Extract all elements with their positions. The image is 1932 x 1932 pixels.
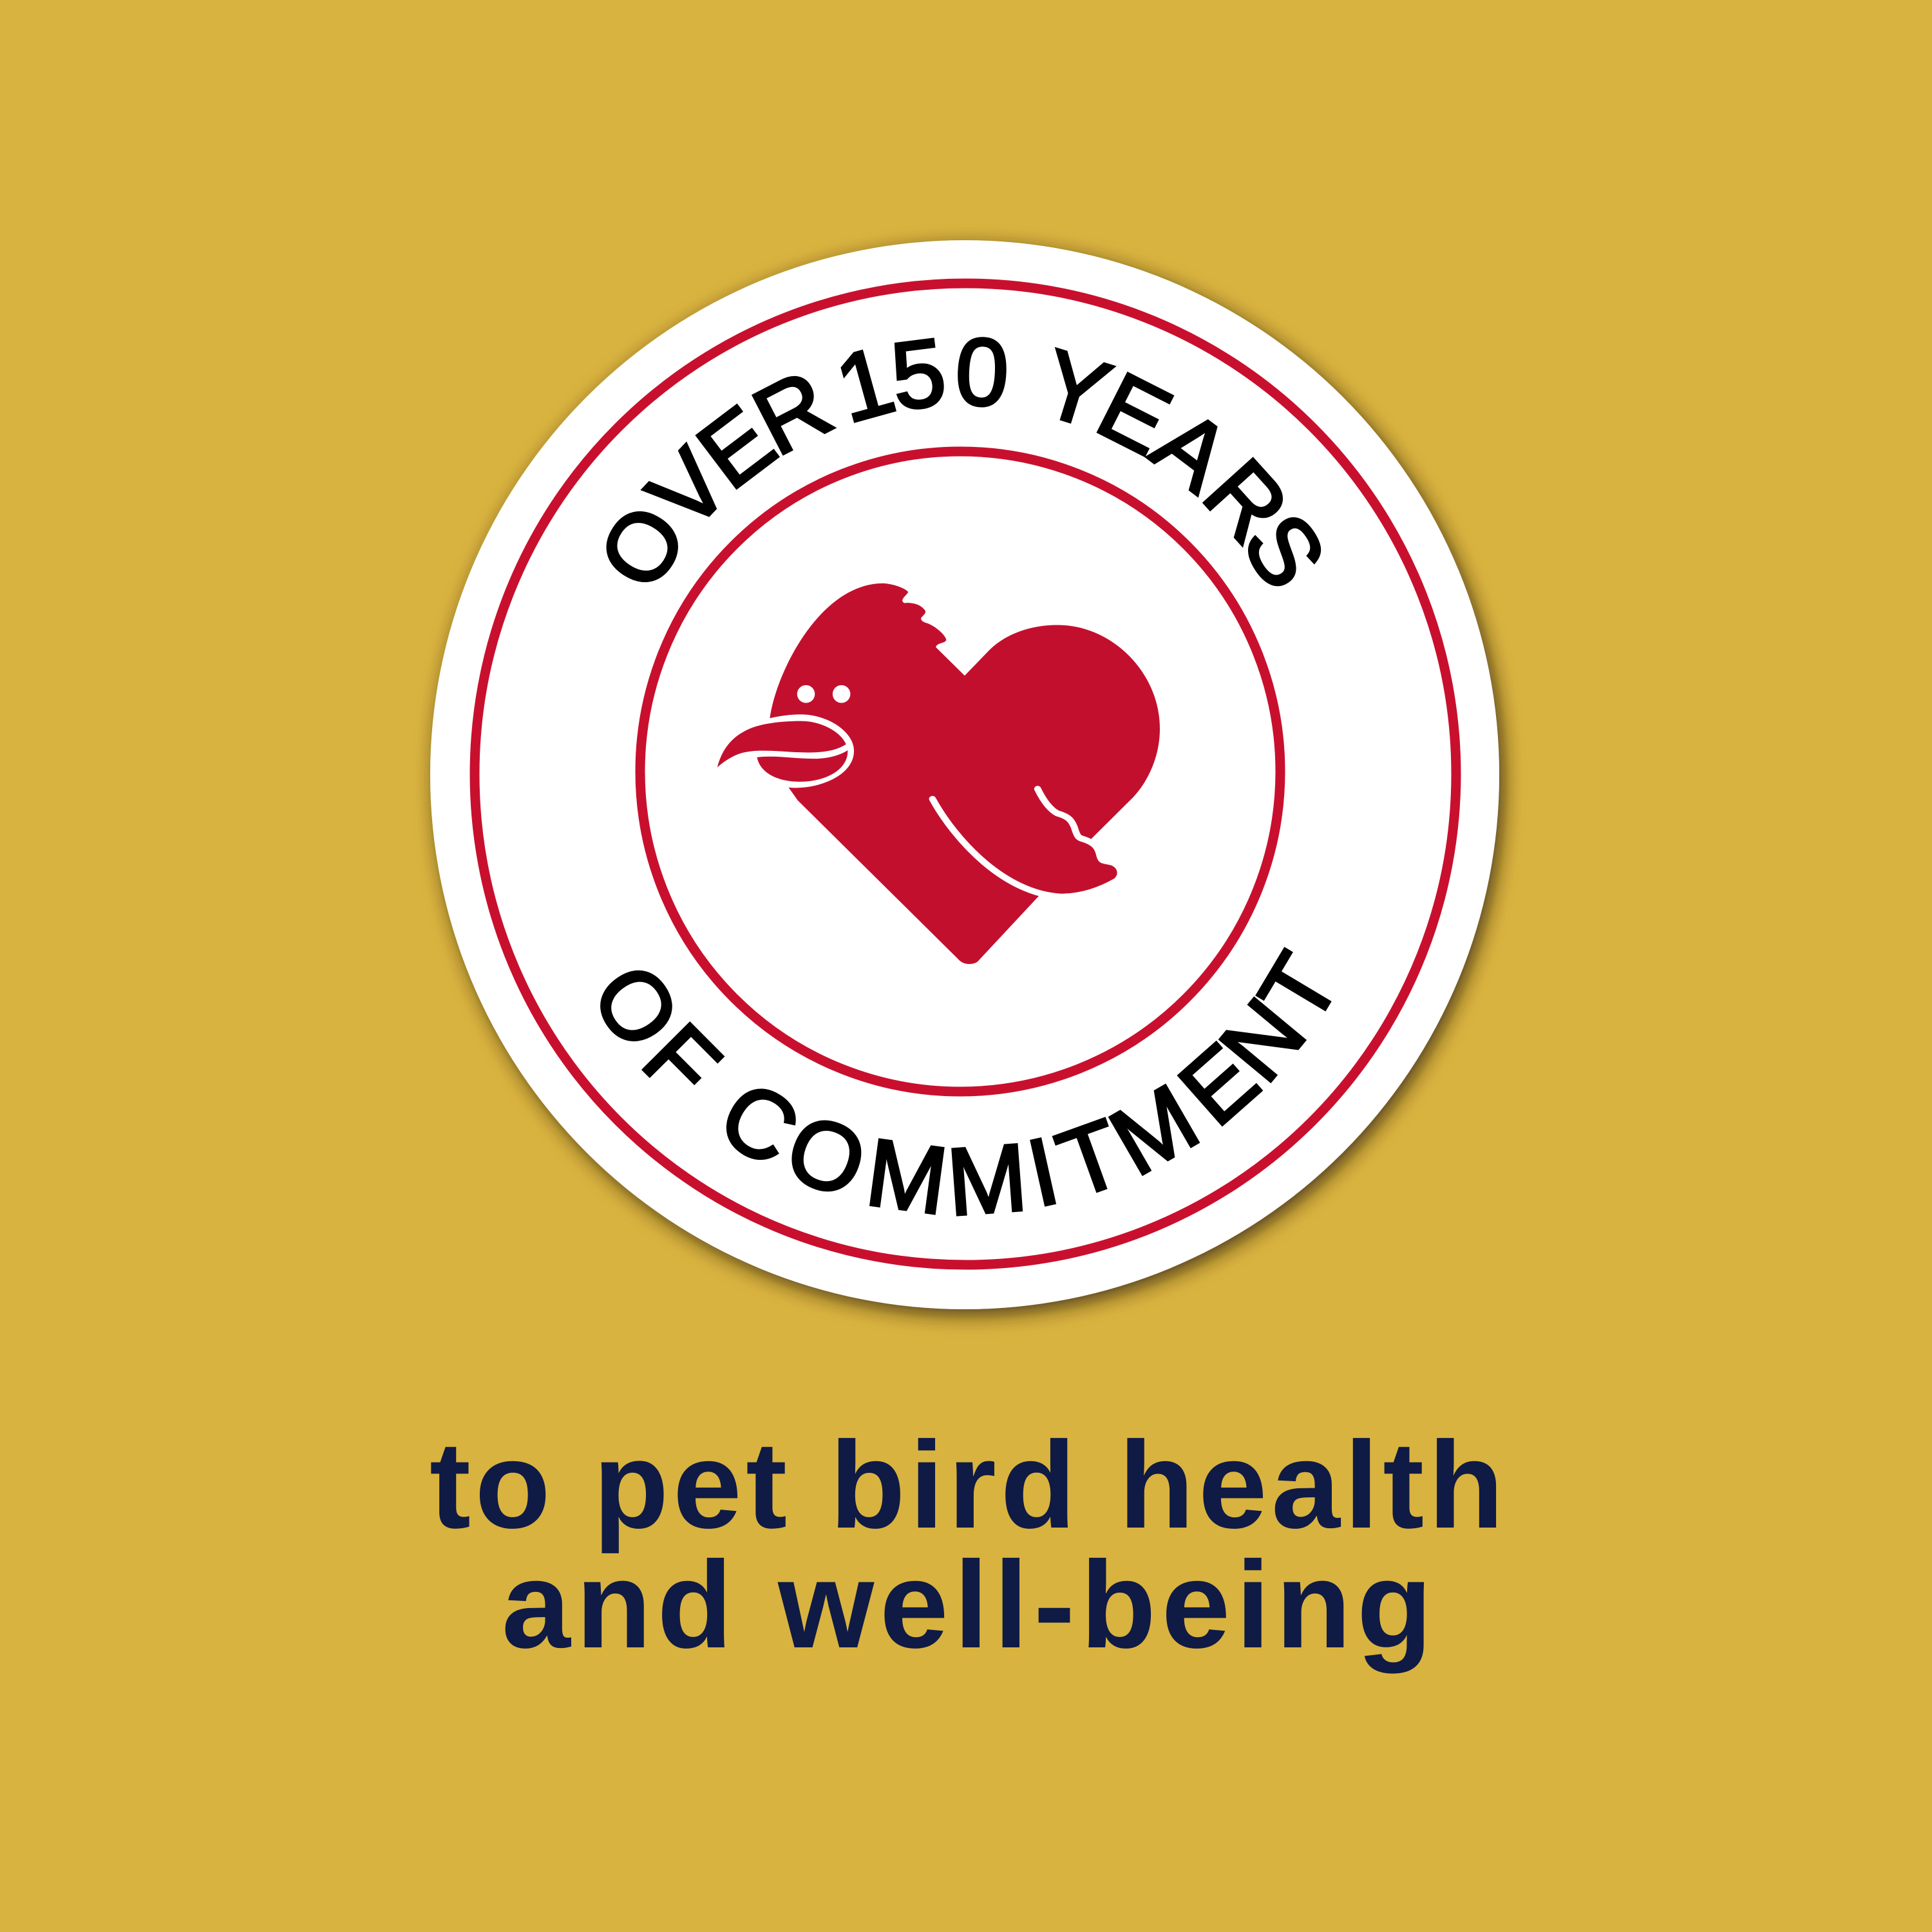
- icon: heart-shaped bird: [717, 583, 1160, 964]
- tagline: [430, 1416, 1504, 1674]
- tagline line 1: to pet bird health: [430, 1416, 1504, 1554]
- left eye: [797, 685, 815, 703]
- curved text: top: OVER 150 YEARS: [607, 337, 1321, 586]
- outer red ring: [475, 283, 1456, 1265]
- tagline line 2: and well-being: [502, 1535, 1432, 1674]
- outer white circle: [430, 240, 1499, 1309]
- wing: [933, 789, 1121, 896]
- right eye: [833, 685, 850, 703]
- inner red ring: [640, 451, 1280, 1092]
- curved text: bottom: OF COMMITMENT: [600, 947, 1332, 1217]
- bird body and heart: [770, 583, 1160, 964]
- upper beak: [717, 721, 846, 767]
- lower beak: [757, 750, 848, 782]
- badge: [419, 231, 1519, 1331]
